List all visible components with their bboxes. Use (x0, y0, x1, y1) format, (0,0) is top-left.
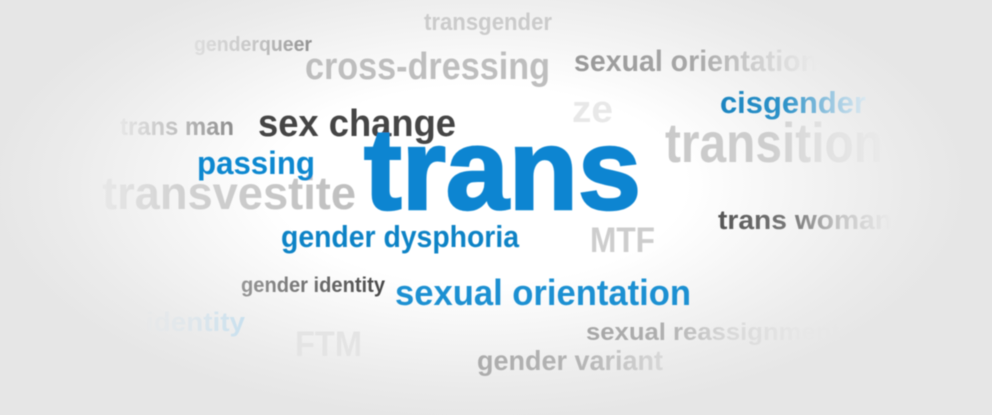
word: sexual reassignment: sexual reassignment (586, 319, 840, 346)
word: genderqueer: genderqueer (194, 34, 312, 56)
word: cross-dressing: cross-dressing (305, 46, 550, 88)
word: trans man: trans man (120, 113, 234, 141)
word: ze: ze (572, 89, 613, 131)
word: passing: passing (197, 145, 315, 181)
word: MTF: MTF (590, 221, 655, 260)
word: transition: transition (665, 111, 883, 174)
word: transvestite: transvestite (102, 167, 356, 219)
word: sexual orientation, top: sexual orientation (574, 45, 818, 78)
word: FTM: FTM (295, 325, 362, 364)
word: gender dysphoria: gender dysphoria (281, 219, 520, 254)
word: cisgender: cisgender (720, 85, 866, 120)
word: sexual orientation, blue: sexual orientation (395, 272, 691, 313)
word: transgender: transgender (424, 9, 552, 36)
word: gender identity: gender identity (241, 274, 385, 297)
word cloud (102, 9, 892, 376)
word: sex change: sex change (258, 103, 456, 145)
word: identity, faded: identity (146, 307, 245, 337)
word: trans, main: trans (364, 106, 641, 234)
word: gender variant: gender variant (477, 345, 663, 376)
word: trans woman: trans woman (718, 205, 892, 235)
